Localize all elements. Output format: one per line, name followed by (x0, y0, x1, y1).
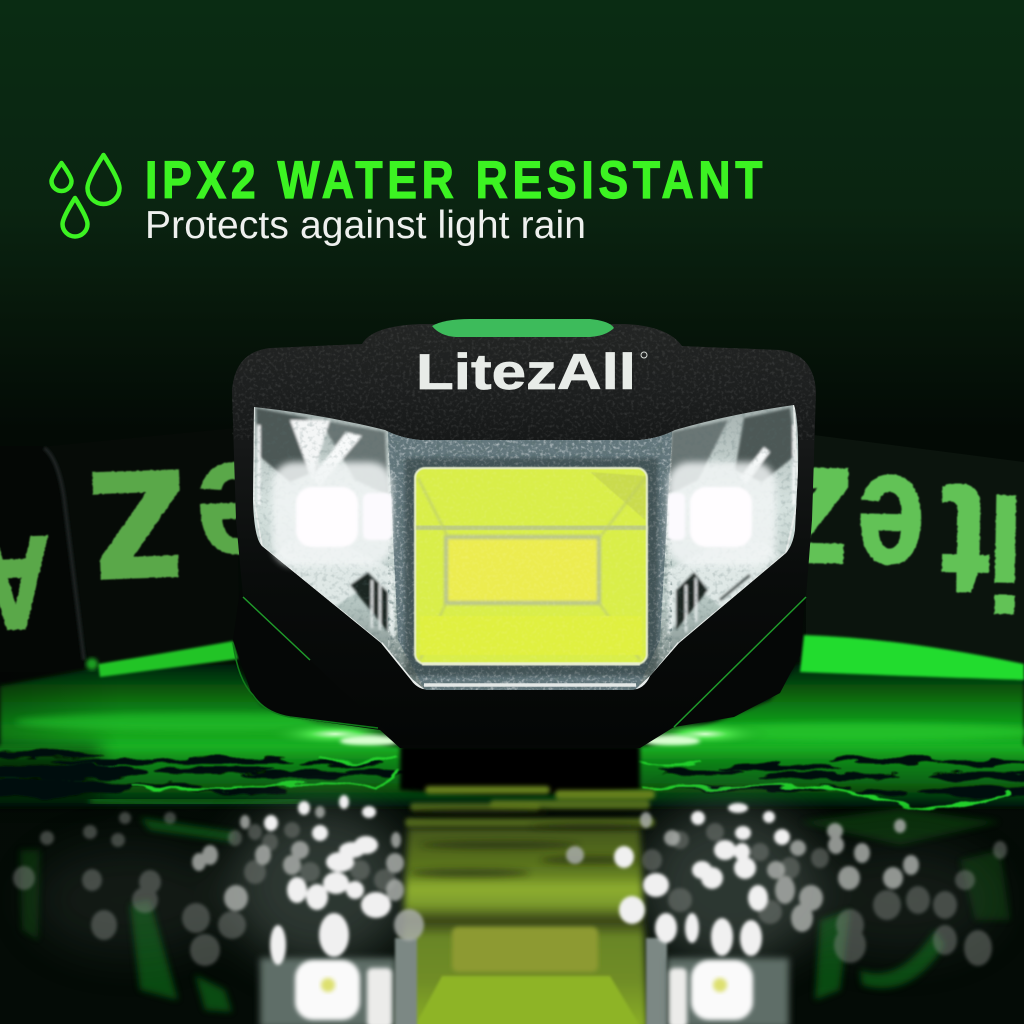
strap lettering: right: t (939, 452, 992, 632)
reflected COB panel (398, 828, 648, 1024)
blurred strap reflections (20, 808, 1010, 1012)
strap lettering: right: z (764, 430, 855, 627)
logo: LitezAll (416, 344, 636, 400)
droplet haze (30, 805, 1000, 965)
lens window water speckle (253, 405, 800, 665)
reflected LEDs (295, 960, 360, 1020)
headband strap: left (0, 428, 240, 690)
strap lettering: left: e (193, 427, 282, 614)
white LED: right (668, 462, 776, 566)
dark water bands (410, 809, 650, 877)
green rim lines (243, 597, 806, 727)
mid droplets (192, 806, 919, 941)
headband strap: right (806, 434, 1024, 666)
reflected olive streaks (405, 786, 655, 827)
strap lettering: left: z (85, 427, 192, 653)
headlamp reflection (260, 786, 789, 1024)
lens window (253, 405, 798, 690)
housing water speckle (232, 325, 816, 440)
strap lettering: left (0, 427, 282, 656)
water droplet bokeh (13, 795, 1007, 966)
faint droplets (13, 812, 1007, 966)
green light pool: right (640, 635, 1024, 752)
COB LED panel (415, 468, 647, 664)
lens reflector facets (254, 405, 798, 690)
strap lettering: right (764, 430, 1024, 642)
title: IPX2 WATER RESISTANT (145, 151, 762, 210)
buckle: left (0, 446, 84, 690)
reflected lens frames (260, 958, 396, 1024)
wet surface with ripples (0, 745, 1024, 808)
strap lettering: right: e (856, 443, 926, 623)
centre frame (388, 432, 672, 690)
strap lettering: right: i (986, 462, 1024, 642)
water drops icon (52, 155, 120, 236)
white LED: left (272, 462, 392, 566)
subtitle: Protects against light rain (145, 204, 586, 247)
bright droplets (264, 795, 790, 965)
lamp rear shell (233, 590, 806, 748)
green light pool: left (0, 641, 415, 752)
green top button (432, 319, 614, 337)
lamp housing (232, 324, 816, 745)
headlamp (232, 319, 816, 748)
